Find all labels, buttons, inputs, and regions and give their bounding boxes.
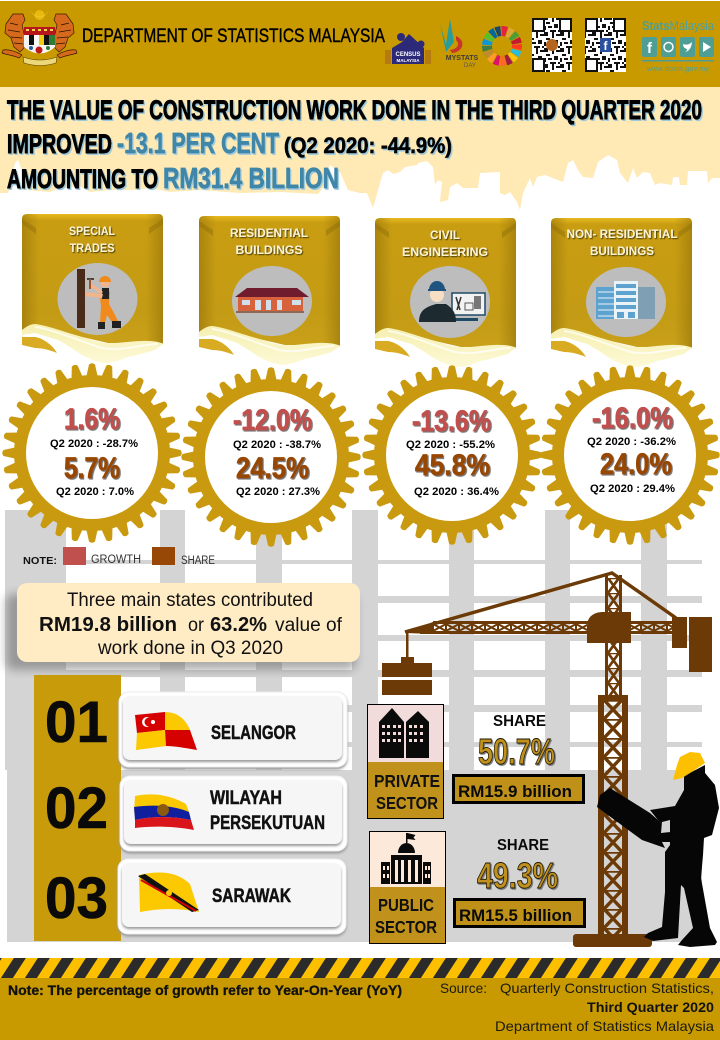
legend: SHARE [181,555,215,567]
callout: three main states: or [188,615,205,636]
label: public sector: SECTOR [375,917,437,937]
panel: private share figures: SHARE [493,713,546,730]
label: Wilayah Persekutuan [210,788,325,834]
icon: QR code facebook [585,18,626,72]
cream title band [0,87,720,213]
label: Wilayah Persekutuan: WILAYAH [210,788,282,809]
previous quarter growth: Q2 2020 : -55.2% [406,439,495,451]
icon: Federal Territory flag [134,794,194,830]
previous quarter share: Q2 2020 : 36.4% [414,486,499,498]
label: residential buildings: RESIDENTIAL [230,226,308,240]
gear: non-residential buildings [540,365,720,545]
callout: three main states [6,583,360,670]
hard hat [673,752,705,780]
label: non-residential buildings: BUILDINGS [590,244,654,258]
icon: MyStats Day logo: DAY [464,63,476,69]
label: Selangor: SELANGOR [211,723,296,744]
icon: house [232,266,312,336]
label: private sector [374,771,440,813]
legend: GROWTH [91,554,141,566]
panel: residential buildings banner [199,216,341,365]
private value box: RM15.9 billion [458,783,572,801]
label: civil engineering [402,228,488,259]
title block: -13.1 PER CENT [117,128,279,160]
icon: office towers [379,708,429,758]
label: non-residential buildings: NON- RESIDENTIAL [566,227,678,241]
panel: non-residential buildings banner [551,218,693,367]
panel: special trades banner [22,214,164,363]
previous quarter share: Q2 2020 : 7.0% [56,486,134,498]
previous quarter growth: Q2 2020 : -28.7% [50,438,138,450]
panel: public share figures [454,837,584,926]
source credit: Source: [440,980,487,996]
growth value: -16.0% [592,402,673,435]
header band [0,1,720,87]
title block [7,95,702,195]
gear: civil engineering [362,365,542,545]
icon: government building [381,833,431,884]
rank numbers: 02 [45,776,108,841]
source credit: Department of Statistics Malaysia [495,1018,714,1034]
legend [23,547,215,567]
title block: IMPROVED [7,129,112,159]
icon: office buildings [586,267,666,337]
label: special trades: SPECIAL [69,224,115,238]
label: public sector [375,895,437,937]
source credit [440,980,714,1034]
card: Sarawak [118,859,346,934]
label: public sector: PUBLIC [378,895,434,915]
panel: private share figures [454,713,584,802]
icon: StatsMalaysia social block: www.dosm.gov.my [646,66,709,73]
callout: three main states: work done in Q3 2020 [97,638,283,659]
icon: MyStats Day logo: MYSTATS [446,55,479,62]
label: private sector: PRIVATE [374,771,440,791]
title block: AMOUNTING TO [7,164,158,194]
icon: census logo: MALAYSIA [396,58,420,63]
icon: census logo [385,33,431,64]
note: year on year: Note: The percentage of growth refer to Year-On-Year (YoY) [8,982,402,998]
panel: private sector [368,704,444,818]
gear: special trades [2,363,182,543]
public value box: RM15.5 billion [459,907,572,925]
previous quarter share: Q2 2020 : 29.4% [590,483,675,495]
label: special trades: TRADES [70,241,114,255]
icon: QR code website [532,18,572,72]
icon: MyStats Day logo [440,19,479,69]
rank numbers [45,690,108,931]
icon: StatsMalaysia social block: StatsMalaysia [642,18,715,33]
label: non-residential buildings [566,227,678,258]
icon: worker with hammer [58,263,138,335]
growth value: -12.0% [233,404,312,437]
panel: public sector [370,832,446,944]
gear: residential buildings [181,367,361,547]
icon: Sarawak flag [138,872,199,912]
icon: census logo: CENSUS [395,52,421,58]
label: residential buildings: BUILDINGS [236,243,302,257]
label: special trades [69,224,115,255]
icon: Selangor flag [135,712,197,750]
label: civil engineering: ENGINEERING [402,245,488,259]
growth value: 1.6% [64,403,120,436]
icon: StatsMalaysia social block [642,18,715,73]
previous quarter growth: Q2 2020 : -36.2% [587,436,676,448]
callout: three main states: Three main states contributed [67,590,313,611]
panel: state ranking [34,675,347,941]
icon: engineer at screen [410,266,490,338]
share value: 45.8% [415,449,490,482]
label: Sarawak: SARAWAK [212,886,291,907]
previous quarter growth: Q2 2020 : -38.7% [233,439,321,451]
icon: StatsMalaysia social block: f [647,40,653,57]
legend: NOTE: [23,555,57,567]
card: Selangor [119,692,347,767]
label: private sector: SECTOR [376,793,438,813]
heading: department name: DEPARTMENT OF STATISTICS MALAYSIA [82,26,385,47]
illustration: site worker silhouette [597,752,719,947]
label: residential buildings [230,226,308,257]
title block: (Q2 2020: -44.9%) [284,133,452,158]
illustration: tower crane [382,573,712,947]
public share value: 49.3% [477,855,558,896]
callout: three main states: RM19.8 billion [39,614,177,636]
source credit: Third Quarter 2020 [587,999,714,1015]
share value: 24.5% [236,452,309,485]
panel: public share figures: SHARE [497,837,549,854]
icon: national crest [2,10,77,66]
panel: civil engineering banner [375,218,517,367]
card: Wilayah Persekutuan [120,776,347,851]
share value: 24.0% [600,448,672,481]
rank numbers: 01 [45,690,108,755]
callout: three main states: 63.2% [210,614,267,636]
rank numbers: 03 [45,866,108,931]
growth value: -13.6% [412,405,491,438]
title block: RM31.4 BILLION [163,163,339,195]
hazard stripe divider [0,958,720,978]
icon: SDG wheel [487,31,517,61]
previous quarter share: Q2 2020 : 27.3% [236,486,320,498]
footer band [0,978,720,1040]
background: grey building grid [5,510,702,942]
private share value: 50.7% [478,731,555,772]
label: civil engineering: CIVIL [430,228,460,242]
icon: QR code facebook: f [604,39,608,53]
label: Wilayah Persekutuan: PERSEKUTUAN [210,813,325,834]
callout: three main states: value of [275,615,343,636]
share value: 5.7% [64,452,120,485]
source credit: Quarterly Construction Statistics, [500,980,714,996]
